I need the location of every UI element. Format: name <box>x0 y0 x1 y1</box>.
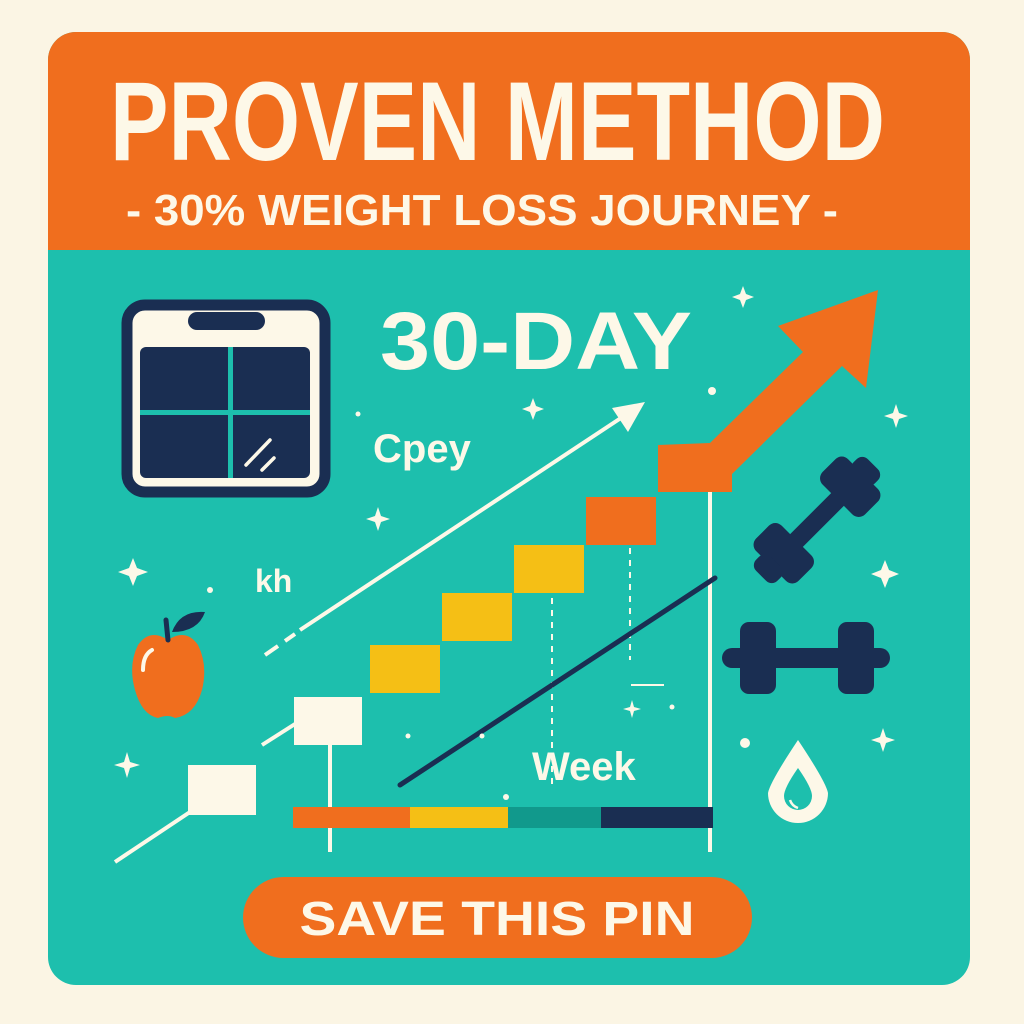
icon: scale <box>127 305 325 492</box>
subtitle: - 30% WEIGHT LOSS JOURNEY - <box>126 186 838 235</box>
decorative lines and chart <box>115 402 715 862</box>
label: kh: kh <box>255 563 292 599</box>
icon: dumbbell horizontal <box>722 622 890 694</box>
panel: header <box>48 32 970 250</box>
color bar <box>293 807 713 828</box>
big orange arrow <box>658 290 878 492</box>
label: Week: Week <box>532 745 637 789</box>
heading: 30-DAY: 30-DAY <box>380 296 692 387</box>
icon: apple <box>132 612 205 718</box>
button: save this pin <box>243 877 752 958</box>
icon: water drop <box>768 740 828 823</box>
icon: dumbbell diagonal <box>740 443 894 597</box>
label: Cpey: Cpey <box>373 427 472 471</box>
button: save this pin: SAVE THIS PIN <box>300 893 694 946</box>
step chart <box>188 445 730 815</box>
sparkles <box>114 286 908 800</box>
